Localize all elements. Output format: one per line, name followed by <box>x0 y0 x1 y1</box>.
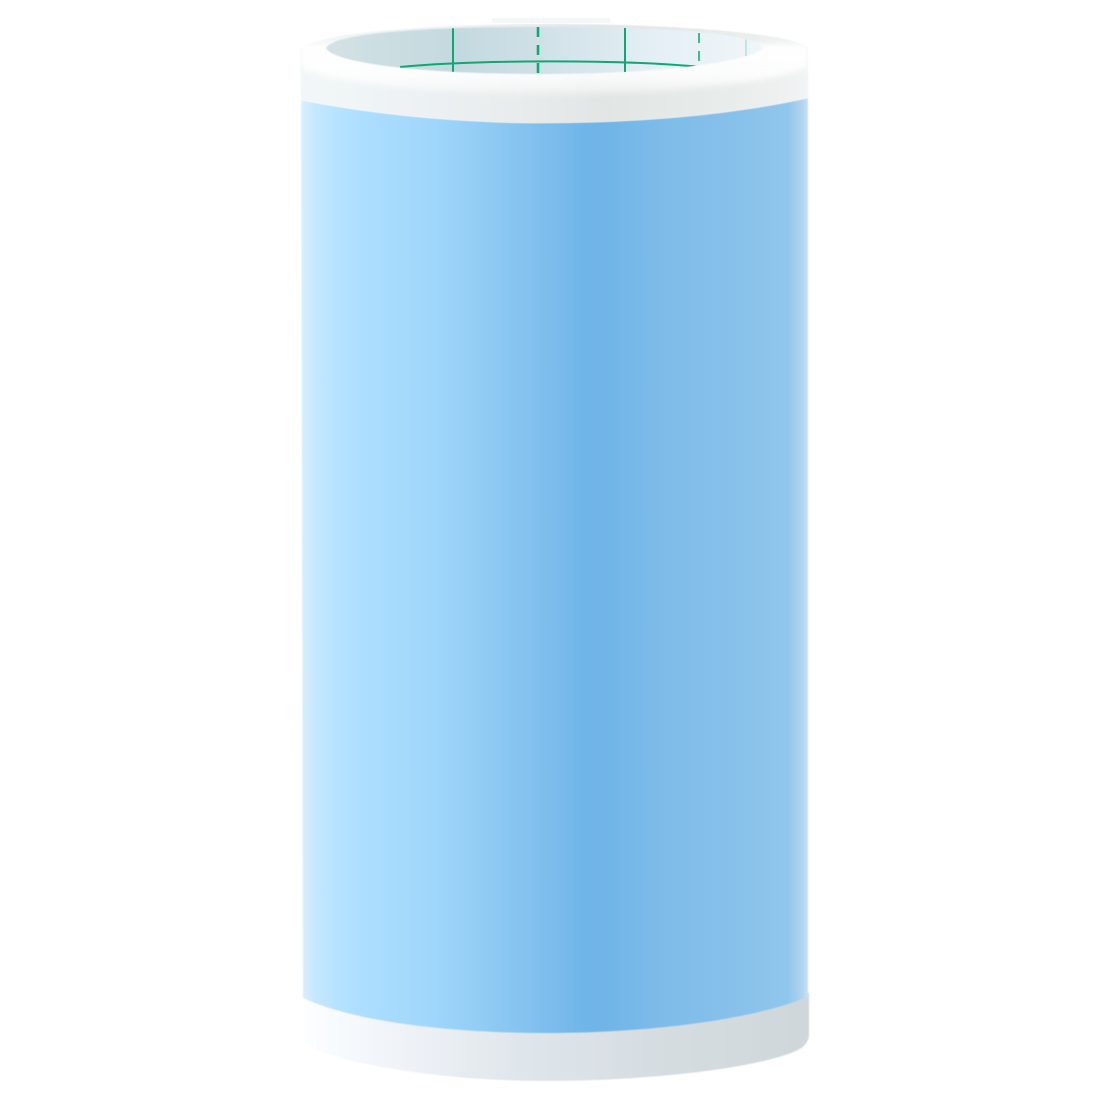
green vertical solid lines <box>453 25 625 72</box>
green dashed lines <box>537 27 539 74</box>
blue film body <box>301 98 808 1033</box>
rim sheet edge <box>492 18 610 23</box>
bottom white rim <box>303 993 809 1081</box>
roll interior with green grid <box>326 25 762 74</box>
green horizontal line <box>400 61 700 67</box>
top white rim <box>300 18 808 123</box>
product illustration: blue film roll <box>300 18 810 1082</box>
rim highlight <box>300 44 808 94</box>
